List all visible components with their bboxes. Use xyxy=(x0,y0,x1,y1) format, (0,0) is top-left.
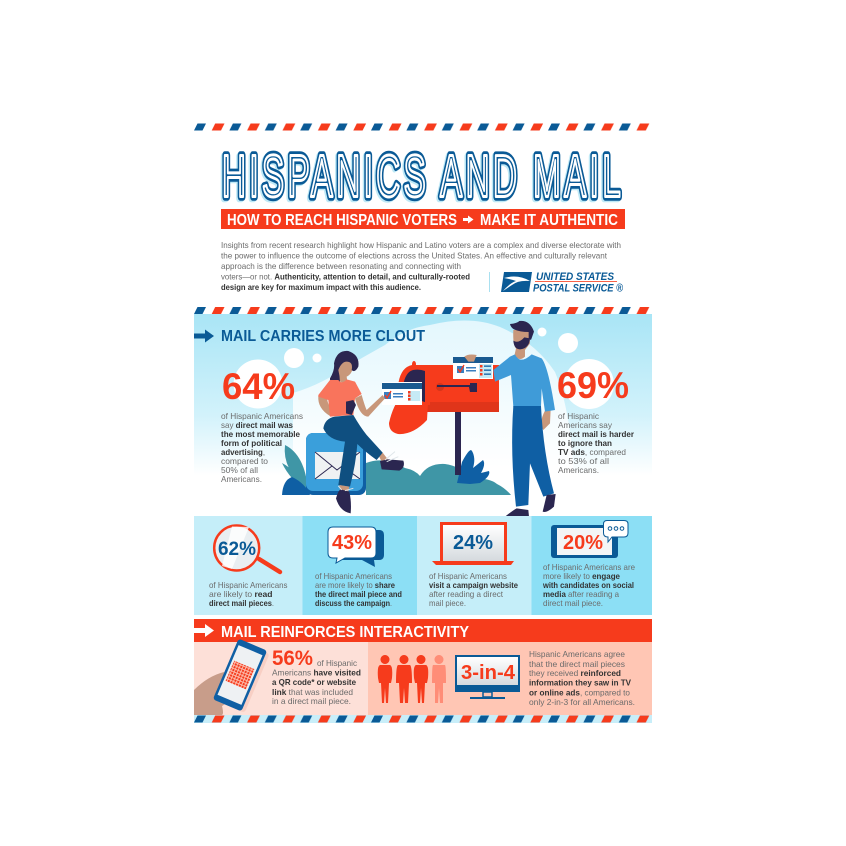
stat: 69%: to 53% of all xyxy=(558,457,609,466)
intro text: approach is the difference between resonating and connecting with xyxy=(221,262,461,271)
panel: 24% visit: of Hispanic Americans xyxy=(429,572,507,581)
intro text: Insights from recent research highlight how Hispanic and Latino voters are a complex and diverse electorate with xyxy=(221,241,621,250)
section heading: MAIL CARRIES MORE CLOUT xyxy=(221,328,425,345)
panel: 62% read: are likely to read xyxy=(209,590,272,599)
icon: TV: 3-in-4 xyxy=(461,662,516,684)
stat: 69%: TV ads, compared xyxy=(558,448,626,457)
panel: 3-in-4: they received reinforced xyxy=(529,669,621,678)
section bar: mail reinforces interactivity xyxy=(194,619,652,642)
stat: 64%: say direct mail was xyxy=(221,421,293,430)
stat: 64%: the most memorable xyxy=(221,430,300,439)
stat: 64% xyxy=(221,366,303,484)
stat: 64%: 50% of all xyxy=(221,466,258,475)
panel: 43% share: of Hispanic Americans xyxy=(315,572,392,581)
subtitle banner xyxy=(221,209,625,229)
intro text xyxy=(221,241,621,292)
intro text: the power to influence the outcome of elections across the United States. An effective and culturally relevant xyxy=(221,252,608,260)
panel: 20% engage: media after reading a xyxy=(543,590,619,599)
airmail stripe: bottom xyxy=(194,715,652,723)
stat: 69%: of Hispanic xyxy=(558,412,599,421)
panel: 3-in-4: Hispanic Americans agree xyxy=(529,650,625,659)
subtitle banner: MAKE IT AUTHENTIC xyxy=(480,212,618,229)
panel: 62% read: direct mail pieces. xyxy=(209,599,274,608)
title: HISPANICS AND MAIL xyxy=(222,145,621,210)
section bar: mail reinforces interactivity: MAIL REINFORCES INTERACTIVITY xyxy=(221,624,470,641)
stat: 69%: Americans say xyxy=(558,421,613,430)
illustration: man xyxy=(464,321,556,517)
panel: 3-in-4: only 2-in-3 for all Americans. xyxy=(529,698,635,707)
icon: laptop: 24% xyxy=(453,532,493,554)
panel: 20% engage: with candidates on social xyxy=(542,581,634,590)
sky background xyxy=(194,314,652,516)
USPS logo xyxy=(489,271,623,294)
stat: 64%: 64% xyxy=(222,366,295,407)
panel: 20% engage: direct mail piece. xyxy=(543,599,603,608)
icon: TV xyxy=(455,655,520,699)
icon: speech bubble: 43% xyxy=(332,532,372,554)
icon: tablet with chat bubble: 20% xyxy=(563,532,603,554)
panel: 62% read xyxy=(194,516,302,615)
illustration: woman xyxy=(318,351,404,513)
panel: 56% QR code: a QR code* or website xyxy=(272,678,356,687)
USPS logo: UNITED STATES xyxy=(536,271,615,283)
stat: 69%: Americans. xyxy=(558,466,599,475)
stat: 69%: to ignore than xyxy=(558,439,612,448)
panel: 3-in-4: information they saw in TV xyxy=(529,678,632,688)
illustration: plants and hills xyxy=(282,445,511,495)
illustration: ballot card right xyxy=(453,357,493,379)
icon: hand holding phone xyxy=(194,639,270,715)
stat: 64%: form of political xyxy=(221,439,282,448)
panel: 43% share: discuss the campaign. xyxy=(315,599,392,608)
icon: magnifier: 62% xyxy=(218,539,256,560)
panel: 43% share: are more likely to share xyxy=(315,581,395,590)
panel: 20% engage: of Hispanic Americans are xyxy=(543,563,635,572)
panel: 43% share xyxy=(302,516,417,615)
stat: 64%: advertising, xyxy=(221,448,265,457)
intro text: voters—or not. Authenticity, attention to detail, and culturally-rooted xyxy=(221,272,470,282)
panel: 24% visit: visit a campaign website xyxy=(429,581,518,590)
title: HISPANICS AND MAIL xyxy=(222,145,621,210)
illustration: mailbox xyxy=(389,361,499,475)
illustration: ballot card left xyxy=(382,382,422,405)
panel: 56% QR code: Americans have visited xyxy=(272,668,361,678)
title: HISPANICS AND MAIL xyxy=(220,146,619,212)
panel: 43% share: the direct mail piece and xyxy=(315,590,402,599)
white bubbles left xyxy=(234,348,322,408)
stat: 69%: 69% xyxy=(557,365,629,406)
panel: 3-in-4 xyxy=(368,642,652,715)
airmail stripe: section xyxy=(194,307,652,314)
stat: 64%: compared to xyxy=(221,457,268,466)
icon: four people xyxy=(378,655,446,703)
panel: 56% QR code: 56% xyxy=(272,647,313,670)
panel: 24% visit: mail piece. xyxy=(429,599,466,608)
intro text: design are key for maximum impact with this audience. xyxy=(221,283,421,292)
illustration: mail icon cube xyxy=(306,433,366,495)
white bubbles right xyxy=(538,328,614,409)
panel: 3-in-4: or online ads, compared to xyxy=(529,688,630,698)
subtitle banner: HOW TO REACH HISPANIC VOTERS xyxy=(227,212,457,229)
panel: 56% QR code: link that was included xyxy=(272,688,353,697)
panel: 56% QR code: of Hispanic xyxy=(317,659,357,668)
stat: 69% xyxy=(557,365,635,475)
panel: 24% visit xyxy=(417,516,532,615)
stat: 64%: of Hispanic Americans xyxy=(221,412,303,421)
panel: mail carries more clout xyxy=(194,314,652,517)
stat: 69%: direct mail is harder xyxy=(558,430,635,439)
panel: 3-in-4: that the direct mail pieces xyxy=(529,660,625,669)
stat: 64%: Americans. xyxy=(221,475,262,484)
panel: 20% engage xyxy=(532,516,652,615)
pale blob xyxy=(293,320,575,516)
USPS logo: POSTAL SERVICE ® xyxy=(533,282,623,294)
panel: 56% QR code xyxy=(194,639,368,715)
panel: 20% engage: more likely to engage xyxy=(543,572,620,581)
panel: 24% visit: after reading a direct xyxy=(429,590,504,599)
panel: 62% read: of Hispanic Americans xyxy=(209,581,288,590)
panel: 56% QR code: in a direct mail piece. xyxy=(272,697,351,706)
airmail stripe: top xyxy=(194,124,652,130)
